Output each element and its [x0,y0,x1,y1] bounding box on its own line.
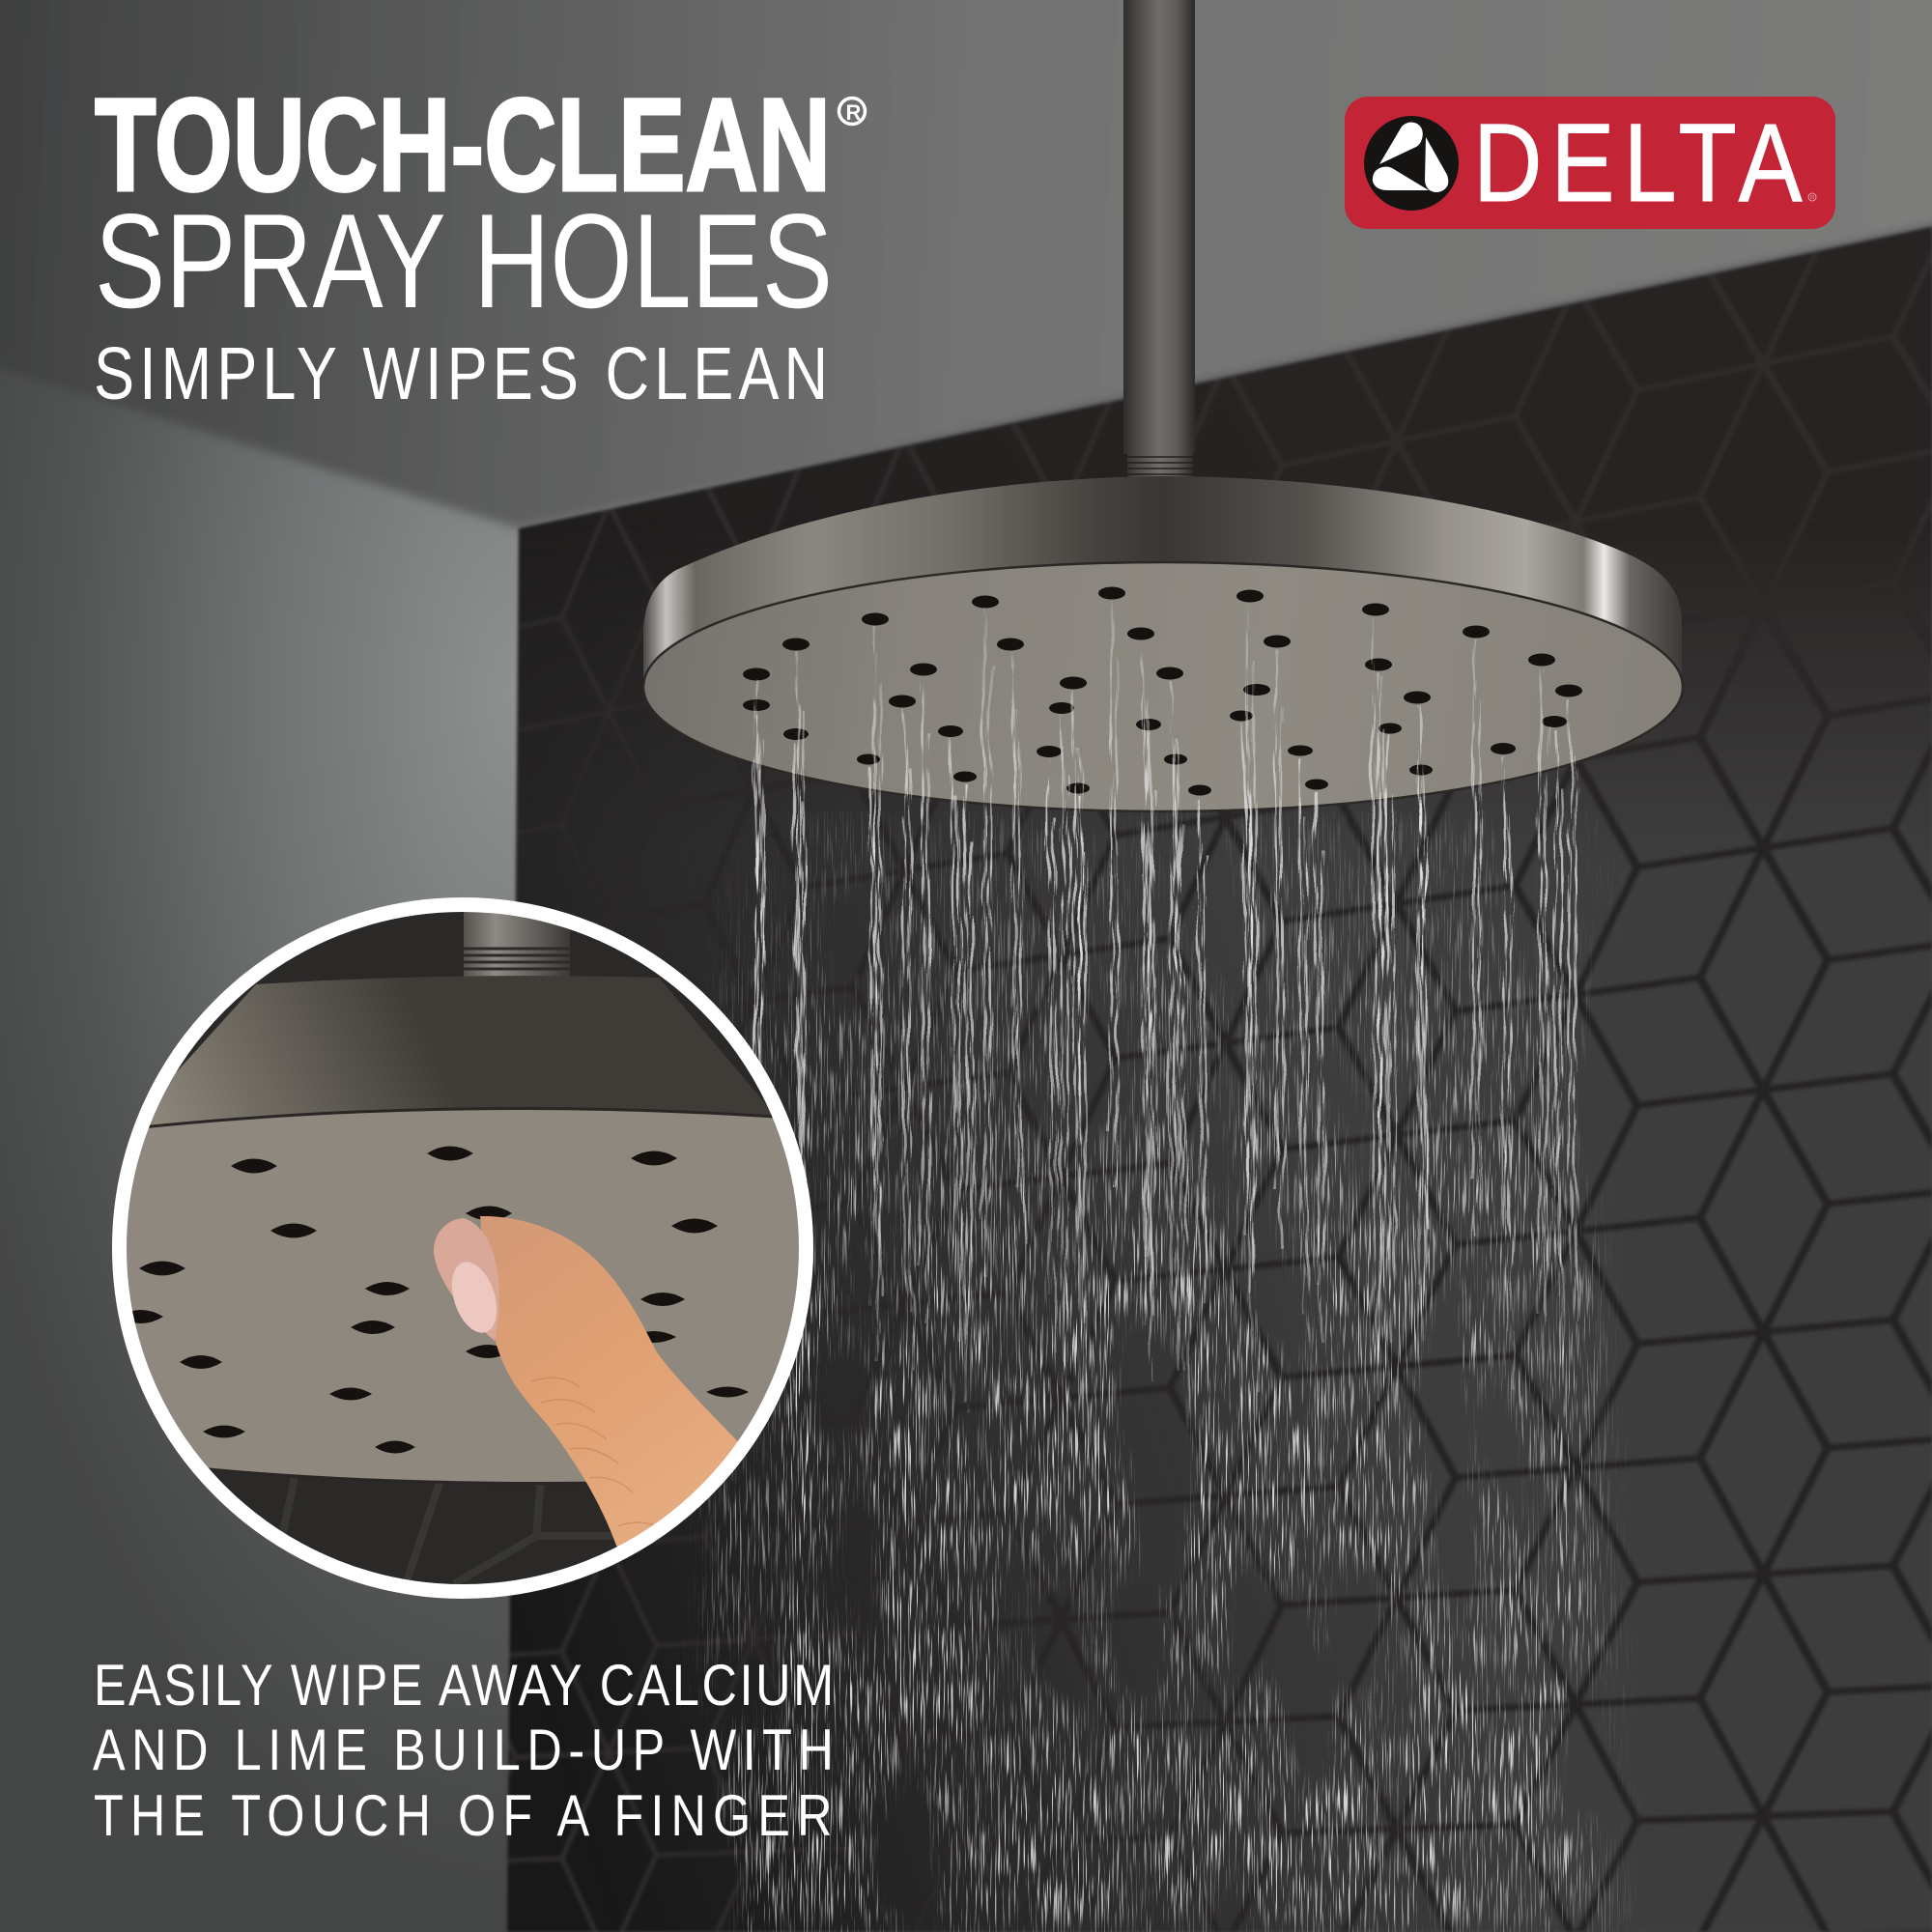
inset wall background [176,912,763,1584]
icon: Delta tri-drop emblem [1364,116,1459,211]
body text block: THE TOUCH OF A FINGER [94,1783,832,1848]
panel: black hexagon tile wall [506,226,1932,1932]
head side band [643,476,1682,687]
inset circle: finger touching spray holes [97,898,831,1604]
shower arm pipe [1123,0,1195,479]
registered mark: R [846,100,862,125]
inset head side band [150,976,771,1125]
inset head spray face [97,1109,831,1488]
registered mark small [1808,193,1816,201]
subtitle: SIMPLY WIPES CLEAN: SIMPLY WIPES CLEAN [94,331,828,414]
registered mark small: R [1810,195,1815,201]
Delta logo badge [1345,97,1835,229]
water streams from spray holes [753,601,1578,1459]
body text block [93,1653,834,1848]
title: TOUCH-CLEAN: TOUCH-CLEAN [95,71,831,219]
inset threaded arm [464,908,570,978]
tile pattern: lit lower right wall [518,632,1932,1932]
wordmark: DELTA: DELTA [1473,100,1803,225]
registered mark [838,99,866,125]
tile pattern: unlit upper wall [508,261,1929,1932]
body text block: EASILY WIPE AWAY CALCIUM [94,1653,834,1718]
shower head [643,476,1683,811]
inset spray holes [119,1146,749,1453]
fine water droplets [676,811,1642,1932]
spray holes [743,587,1582,796]
body text block: AND LIME BUILD-UP WITH [93,1718,834,1782]
finger [433,1216,738,1547]
inset white ring [120,904,806,1592]
title: SPRAY HOLES: SPRAY HOLES [95,186,833,336]
head spray face [643,562,1683,811]
